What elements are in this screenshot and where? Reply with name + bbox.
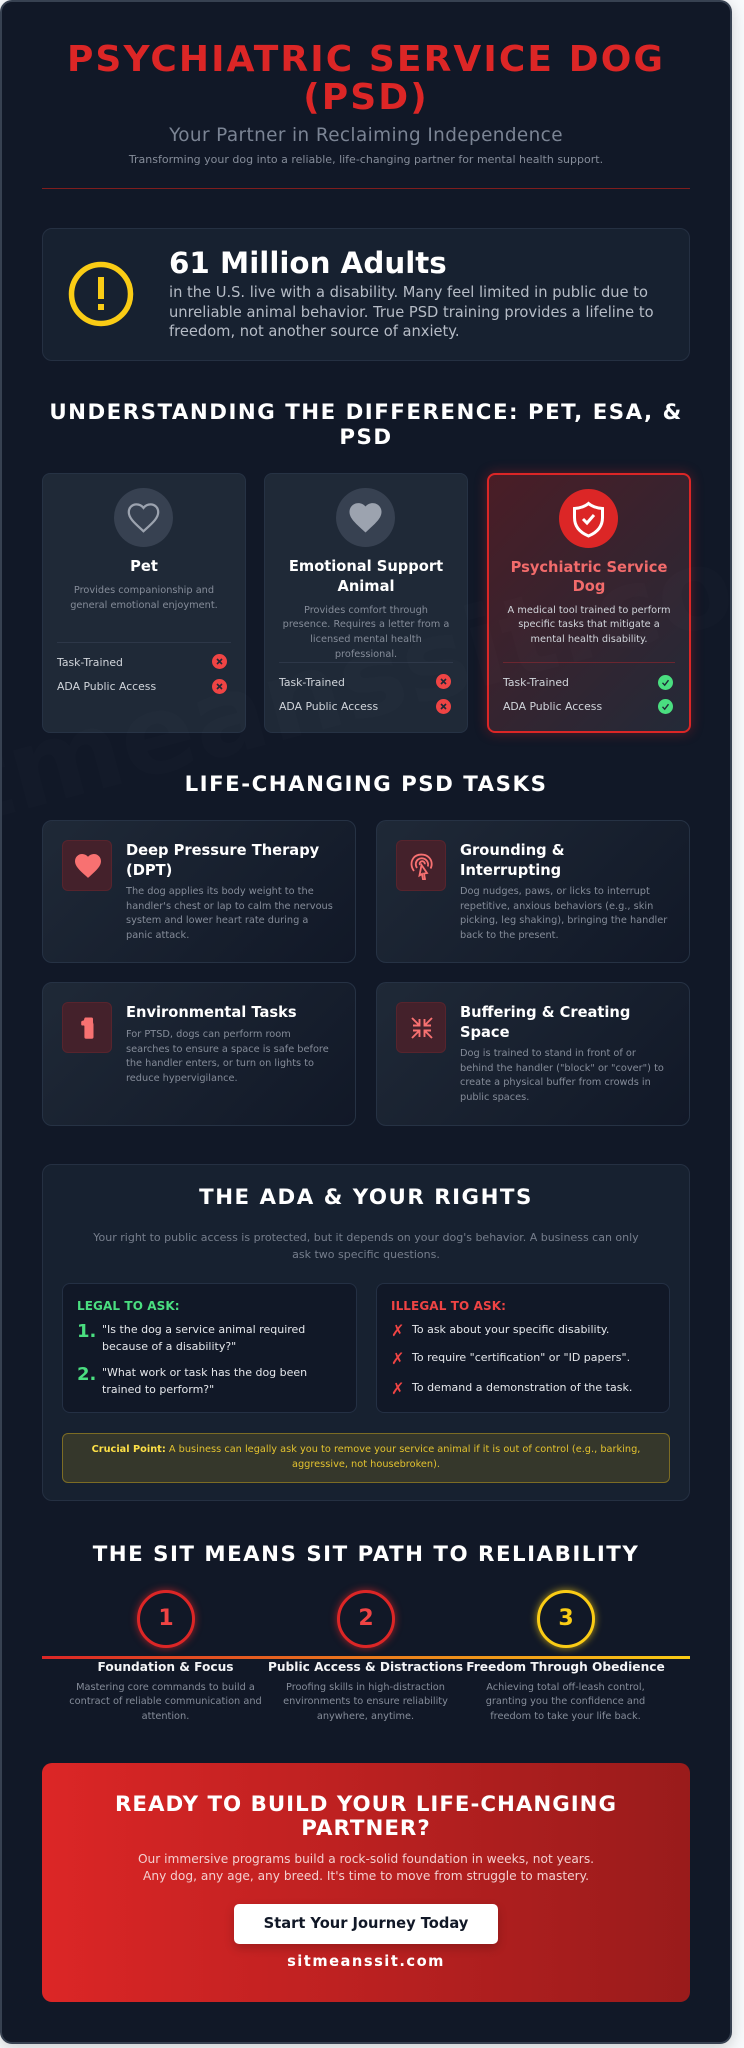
panel: statistic — [42, 228, 690, 361]
task title — [126, 842, 319, 879]
question 1: because of a disability?" — [102, 1340, 236, 1352]
icon: no — [212, 654, 227, 669]
title: PSYCHIATRIC SERVICE DOG — [67, 38, 665, 80]
step 3 circle — [537, 1590, 595, 1648]
heading: understanding the difference: UNDERSTANDING THE DIFFERENCE: PET, ESA, & — [49, 400, 683, 425]
title — [67, 38, 665, 118]
step 2 text: Proofing skills in high-distraction — [286, 1682, 445, 1692]
task title — [460, 1004, 630, 1041]
panel: grounding and interrupting — [376, 820, 690, 963]
step 1 circle: 1 — [158, 1606, 174, 1631]
step 3 text — [466, 1660, 665, 1722]
CTA text: Our immersive programs build a rock-solid foundation in weeks, not years. — [138, 1852, 594, 1866]
task description: reduce hypervigilance. — [126, 1073, 238, 1084]
task-trained row: Task-Trained — [57, 656, 123, 669]
question 1: 1. — [77, 1320, 96, 1342]
icon: touch pointer — [396, 840, 446, 891]
card description: A medical tool trained to perform — [508, 604, 670, 616]
heading: life-changing tasks: LIFE-CHANGING PSD TASKS — [185, 772, 547, 797]
illegal item 2: To require "certification" or "ID papers". — [412, 1351, 630, 1364]
panel: call to action — [42, 1763, 690, 2002]
question 2 — [77, 1364, 307, 1396]
card title: Dog — [573, 578, 605, 595]
illegal item 1: ✗ — [391, 1320, 404, 1340]
crucial point callout: Crucial Point: A business can legally ask you to remove your service animal if it is out of control (e.g., barking, — [92, 1444, 640, 1455]
task description: handler's chest or lap to calm the nervous — [126, 901, 333, 912]
panel: ADA and your rights — [42, 1164, 690, 1501]
card description — [508, 604, 670, 645]
illegal item 2: ✗ — [391, 1349, 404, 1368]
public access row: ADA Public Access — [503, 700, 602, 713]
task description: panic attack. — [126, 930, 189, 941]
crucial point callout — [62, 1433, 670, 1483]
CTA heading: PARTNER? — [301, 1816, 431, 1841]
legal label: LEGAL TO ASK: — [77, 1299, 180, 1313]
question 1 — [77, 1320, 305, 1352]
task description: create a physical buffer from crowds in — [460, 1077, 651, 1088]
card title — [289, 558, 443, 595]
intro text: Your right to public access is protected, but it depends on your dog's behavior. A business can only — [93, 1230, 639, 1244]
CTA heading — [115, 1792, 617, 1841]
icon: no — [436, 699, 451, 714]
task description — [460, 886, 668, 941]
illegal item 3: To demand a demonstration of the task. — [412, 1380, 632, 1394]
task description: picking, leg shaking), bringing the handler — [460, 915, 667, 926]
icon: no — [212, 679, 227, 694]
heading: path to reliability: THE SIT MEANS SIT PATH TO RELIABILITY — [93, 1542, 639, 1566]
icon: compress arrows — [396, 1002, 446, 1053]
task description: Dog nudges, paws, or licks to interrupt — [460, 886, 650, 897]
card title: Pet — [130, 558, 158, 575]
illegal questions box — [376, 1283, 670, 1413]
step 1 text: contract of reliable communication and — [69, 1696, 262, 1707]
task title: Space — [460, 1024, 510, 1041]
icon: shield check — [559, 489, 618, 548]
step 2 text: anywhere, anytime. — [317, 1711, 414, 1722]
panel: buffering and creating space — [376, 982, 690, 1126]
question 1: "Is the dog a service animal required — [102, 1322, 305, 1336]
card title: Emotional Support — [289, 558, 443, 575]
step 3 text: granting you the confidence and — [486, 1696, 645, 1707]
intro text: ask two specific questions. — [292, 1248, 440, 1260]
card description: Provides comfort through — [304, 604, 428, 616]
subtitle: Your Partner in Reclaiming Independence — [169, 125, 563, 146]
task description: searches to ensure a space is safe before — [126, 1044, 329, 1055]
task description: system and lower heart rate during a — [126, 915, 308, 926]
task title: Deep Pressure Therapy — [126, 842, 319, 859]
card description — [70, 585, 218, 611]
icon: yes — [658, 699, 673, 714]
legal questions box — [62, 1283, 357, 1413]
task title — [460, 842, 565, 879]
step 1 text: attention. — [142, 1711, 189, 1722]
task title: Grounding & — [460, 842, 565, 859]
heading: THE ADA & YOUR RIGHTS — [199, 1184, 533, 1210]
step 2 text — [268, 1660, 463, 1722]
illegal item 1 — [391, 1320, 609, 1340]
task title: Buffering & Creating — [460, 1004, 630, 1021]
task description: back to the present. — [460, 930, 559, 941]
CTA button — [234, 1904, 498, 1944]
card description: mental health disability. — [530, 634, 648, 645]
icon: filled heart — [336, 488, 395, 547]
step 3 text: Freedom Through Obedience — [466, 1660, 665, 1674]
panel: environmental tasks — [42, 982, 356, 1126]
statistic text: unreliable animal behavior. True PSD training provides a lifeline to — [169, 304, 654, 321]
task-trained row: Task-Trained — [279, 676, 345, 689]
illegal item 3 — [391, 1378, 632, 1398]
step 2 text: environments to ensure reliability — [283, 1696, 448, 1707]
step 2 circle — [337, 1590, 395, 1648]
task title: Environmental Tasks — [126, 1004, 297, 1021]
crucial point callout: aggressive, not housebroken). — [292, 1459, 440, 1470]
step 2 circle: 2 — [358, 1606, 374, 1631]
card description: specific tasks that mitigate a — [518, 619, 660, 630]
step 1 circle — [137, 1590, 195, 1648]
task description: the handler enters, or turn on lights to — [126, 1058, 314, 1069]
task description — [460, 1048, 664, 1103]
panel: psychiatric service dog — [487, 473, 691, 733]
statistic text: in the U.S. live with a disability. Many feel limited in public due to — [169, 284, 648, 301]
illegal item 2 — [391, 1349, 630, 1368]
panel: emotional support animal — [264, 473, 468, 733]
step 2 text: Public Access & Distractions — [268, 1660, 463, 1674]
task description: Dog is trained to stand in front of or — [460, 1048, 636, 1059]
card title — [511, 558, 667, 595]
CTA text: Any dog, any age, any breed. It's time to move from struggle to mastery. — [143, 1869, 589, 1883]
illegal label: ILLEGAL TO ASK: — [391, 1299, 506, 1313]
step 3 circle: 3 — [558, 1606, 574, 1631]
tagline: Transforming your dog into a reliable, life-changing partner for mental health support. — [129, 152, 603, 166]
CTA heading: READY TO BUILD YOUR LIFE-CHANGING — [115, 1792, 617, 1816]
card description: general emotional enjoyment. — [70, 600, 218, 611]
card description: Provides companionship and — [74, 585, 214, 596]
public access row: ADA Public Access — [279, 700, 378, 713]
step 1 text — [69, 1660, 262, 1722]
icon: outline heart — [114, 488, 173, 547]
step 1 text: Foundation & Focus — [97, 1660, 234, 1674]
intro text — [93, 1230, 639, 1260]
task description: repetitive, anxious behaviors (e.g., skin — [460, 901, 653, 912]
card title: Animal — [338, 578, 394, 595]
title: (PSD) — [303, 76, 429, 118]
card title: Psychiatric Service — [511, 558, 667, 576]
task description: For PTSD, dogs can perform room — [126, 1029, 291, 1040]
question 2: trained to perform?" — [102, 1383, 214, 1396]
CTA button: Start Your Journey Today — [264, 1915, 468, 1932]
question 2: 2. — [77, 1364, 96, 1385]
icon: warning circle — [68, 262, 134, 326]
heading: understanding the difference: PSD — [339, 425, 393, 450]
step 1 text: Mastering core commands to build a — [76, 1682, 255, 1692]
public access row: ADA Public Access — [57, 680, 156, 693]
card description: presence. Requires a letter from a — [283, 619, 449, 630]
task description — [126, 886, 333, 941]
task title: Interrupting — [460, 862, 561, 879]
task description: behind the handler ("block" or "cover") to — [460, 1063, 664, 1074]
task title: (DPT) — [126, 862, 172, 879]
CTA text — [138, 1852, 594, 1883]
card description — [283, 604, 449, 660]
task description: The dog applies its body weight to the — [126, 886, 314, 897]
statistic headline: 61 Million Adults — [169, 246, 447, 280]
card description: professional. — [335, 649, 397, 660]
panel: deep pressure therapy — [42, 820, 356, 963]
illegal item 3: ✗ — [391, 1378, 404, 1398]
question 2: "What work or task has the dog been — [102, 1366, 307, 1379]
task description — [126, 1029, 329, 1084]
task description: public spaces. — [460, 1092, 529, 1103]
step 3 text: freedom to take your life back. — [490, 1711, 641, 1722]
illegal item 1: To ask about your specific disability. — [412, 1322, 609, 1336]
statistic text — [169, 284, 654, 340]
panel: pet — [42, 473, 246, 733]
icon: no — [436, 674, 451, 689]
step 3 text: Achieving total off-leash control, — [486, 1682, 645, 1692]
task-trained row: Task-Trained — [503, 676, 569, 689]
card description: licensed mental health — [310, 634, 422, 645]
website: sitmeanssit.com — [287, 1953, 445, 1970]
progress line — [42, 1656, 690, 1659]
icon: heart — [62, 840, 112, 891]
icon: flashlight — [62, 1002, 112, 1053]
statistic text: freedom, not another source of anxiety. — [169, 323, 460, 340]
heading: understanding the difference — [49, 400, 683, 450]
icon: yes — [658, 675, 673, 690]
